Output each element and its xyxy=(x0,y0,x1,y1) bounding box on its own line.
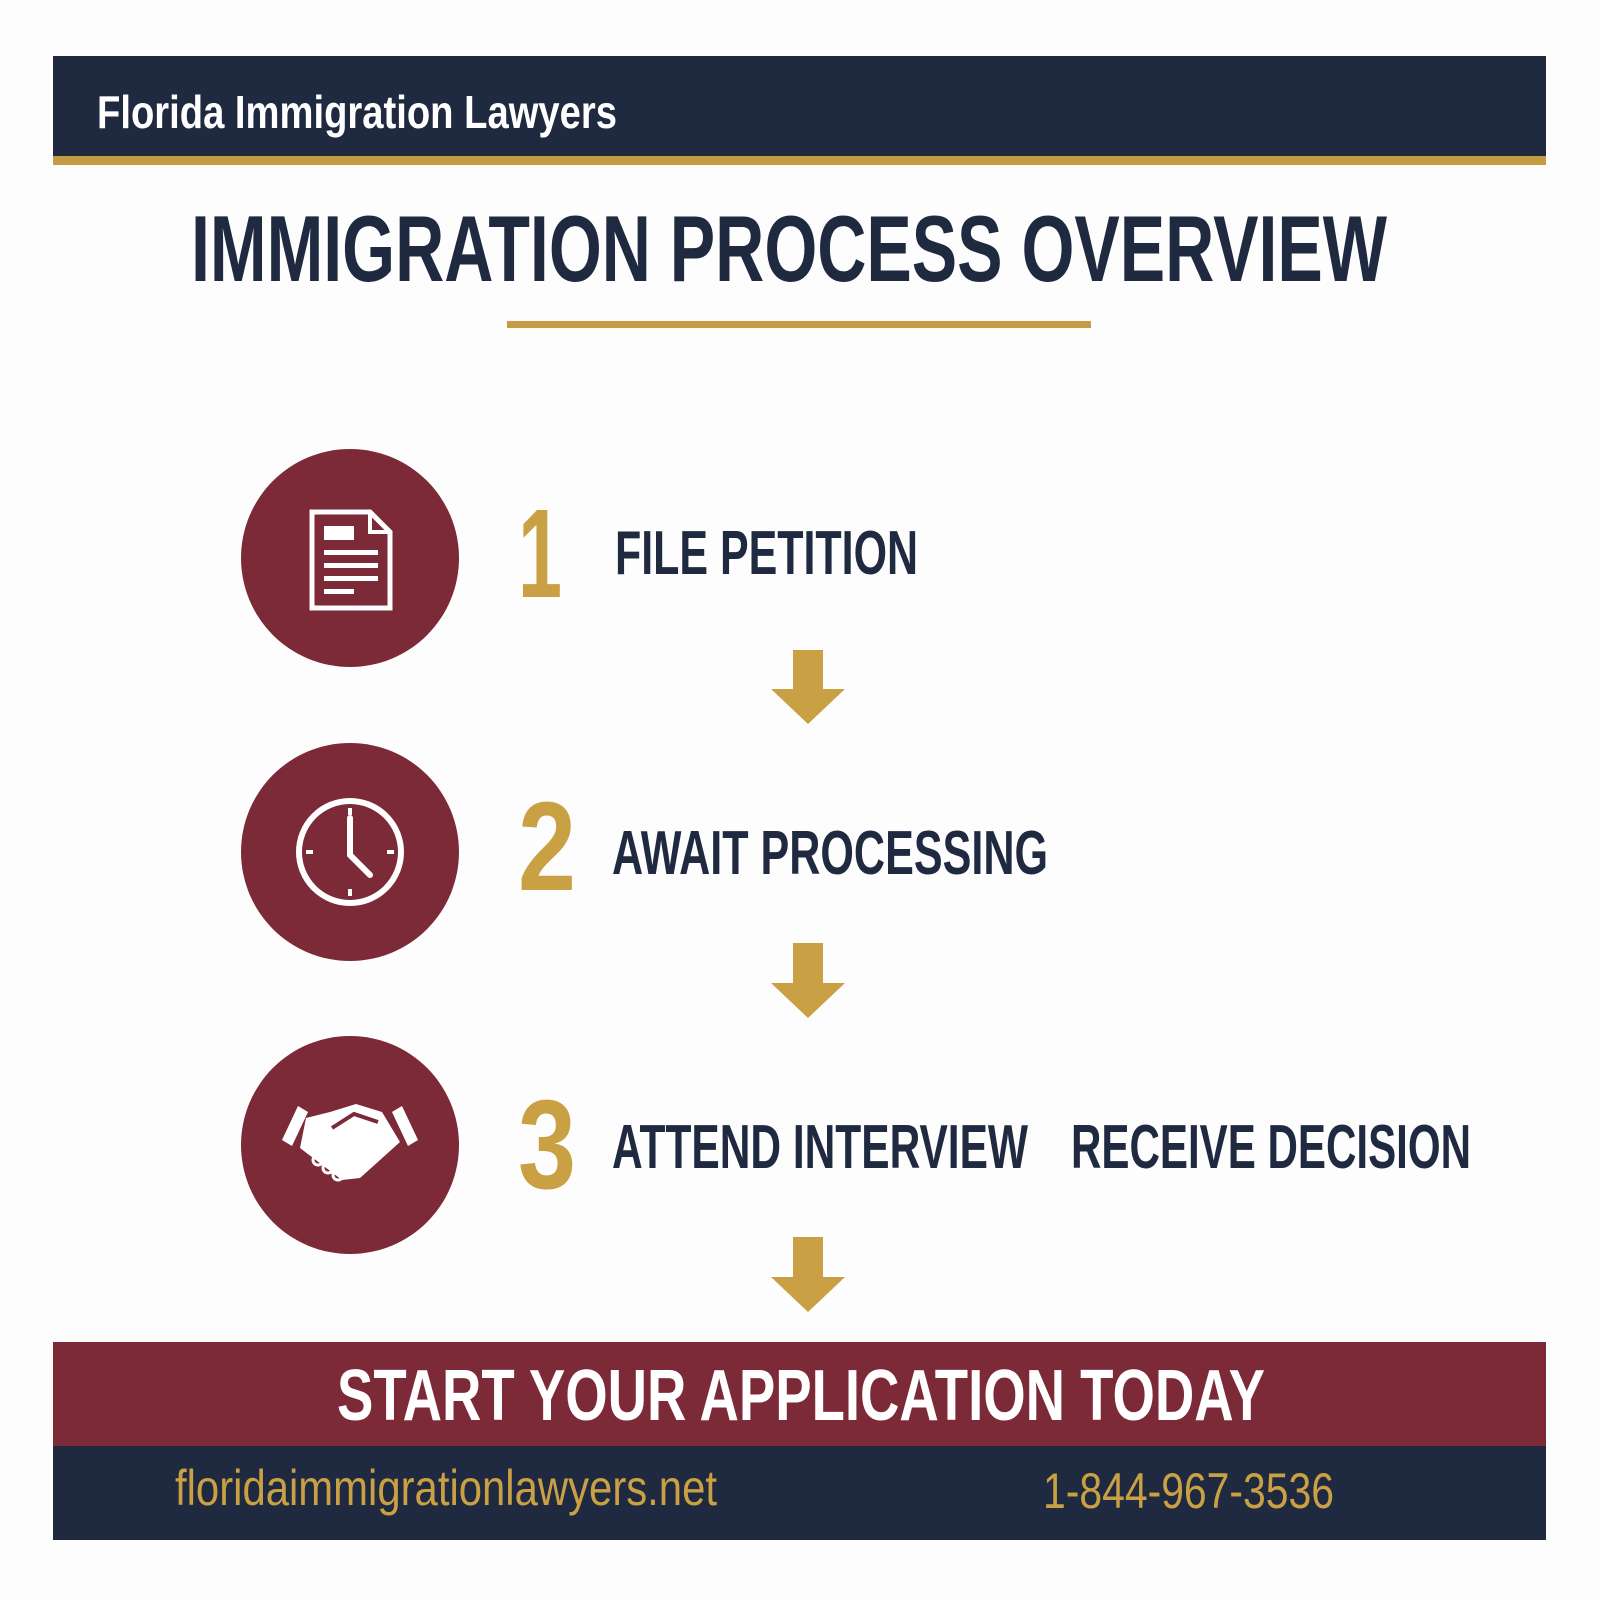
footer contact bar xyxy=(53,1446,1546,1540)
icon: document xyxy=(241,449,459,667)
arrow 3 xyxy=(771,1237,845,1312)
header bar xyxy=(53,56,1546,165)
arrow 1 xyxy=(771,650,845,724)
number 2: 2 xyxy=(518,776,576,917)
label: attend interview: ATTEND INTERVIEW xyxy=(612,1113,1028,1182)
cta text: START YOUR APPLICATION TODAY xyxy=(337,1356,1265,1436)
label: await processing: AWAIT PROCESSING xyxy=(612,819,1048,888)
header text: Florida Immigration Lawyers xyxy=(97,86,617,138)
cta banner xyxy=(53,1342,1546,1446)
number 3: 3 xyxy=(518,1074,576,1215)
number 1: 1 xyxy=(518,483,562,624)
arrow 2 xyxy=(771,943,845,1018)
phone: 1-844-967-3536 xyxy=(1043,1463,1334,1519)
label: file petition: FILE PETITION xyxy=(615,519,918,588)
website: floridaimmigrationlawyers.net xyxy=(175,1460,717,1516)
icon: handshake xyxy=(241,1036,459,1254)
step 2 xyxy=(241,743,1048,961)
title underline xyxy=(507,321,1091,328)
step 3 xyxy=(241,1036,1471,1254)
step 1 xyxy=(241,449,918,667)
icon: clock xyxy=(241,743,459,961)
